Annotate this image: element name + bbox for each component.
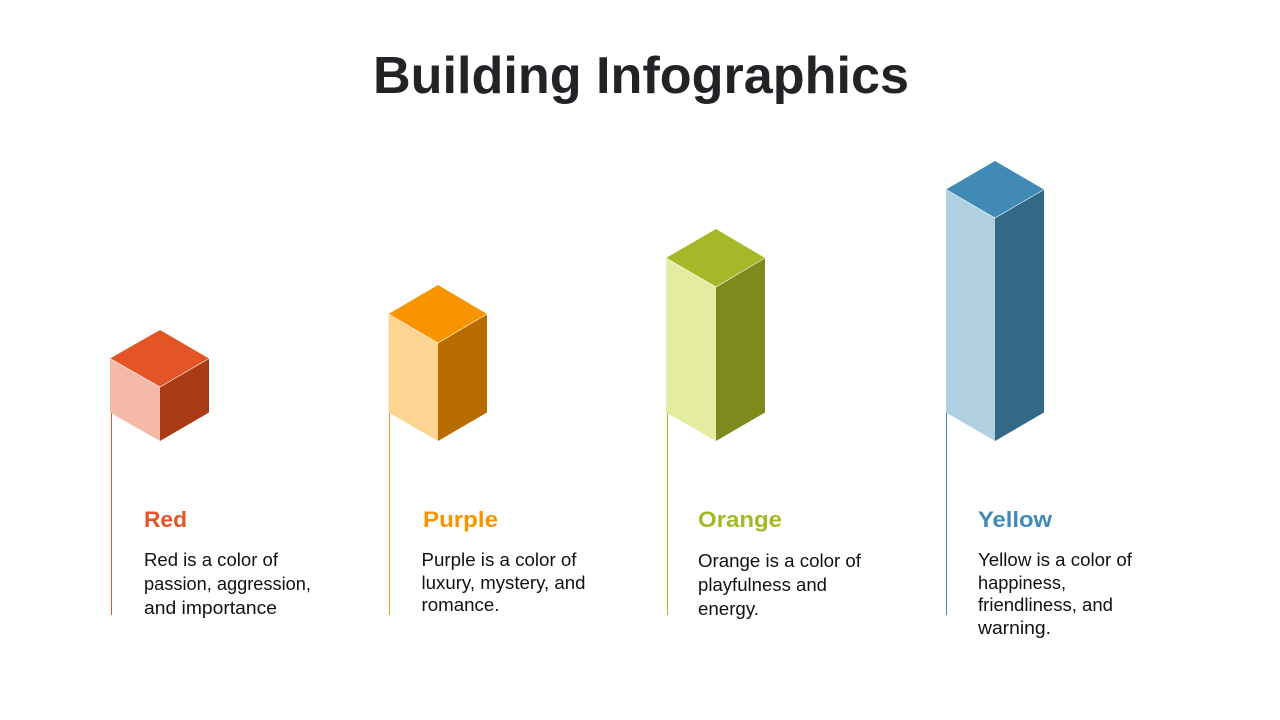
text: purple: Purple is a color of bbox=[422, 549, 577, 570]
panel: yellow bbox=[946, 161, 1137, 638]
panel: purple bbox=[388, 285, 591, 615]
heading: red: Red bbox=[144, 507, 187, 532]
text: red: and importance bbox=[144, 597, 277, 618]
leader line: purple bbox=[388, 412, 390, 615]
text: purple: romance. bbox=[422, 594, 500, 615]
building: red bbox=[110, 330, 209, 441]
text: orange: Orange is a color of bbox=[698, 550, 862, 571]
text: yellow: warning. bbox=[977, 617, 1051, 638]
heading: yellow: Yellow bbox=[978, 507, 1053, 532]
text: orange: playfulness and bbox=[698, 574, 827, 595]
building: yellow bbox=[946, 161, 1044, 441]
text: yellow: friendliness, and bbox=[978, 594, 1113, 615]
text: orange: energy. bbox=[698, 598, 759, 619]
text: red: passion, aggression, bbox=[144, 573, 311, 594]
panel: orange bbox=[666, 229, 866, 619]
building: orange bbox=[666, 229, 765, 441]
text: red: Red is a color of bbox=[144, 549, 279, 570]
panel: red bbox=[110, 330, 316, 618]
text: yellow: Yellow is a color of bbox=[978, 549, 1133, 570]
title: Building Infographics bbox=[373, 47, 909, 105]
leader line: orange bbox=[666, 412, 668, 615]
leader line: red bbox=[110, 412, 112, 615]
leader line: yellow bbox=[946, 412, 948, 615]
text: yellow: happiness, bbox=[978, 572, 1066, 593]
heading: orange: Orange bbox=[698, 507, 782, 532]
text: purple: luxury, mystery, and bbox=[422, 572, 586, 593]
building: purple bbox=[388, 285, 487, 441]
heading: purple: Purple bbox=[423, 507, 498, 532]
